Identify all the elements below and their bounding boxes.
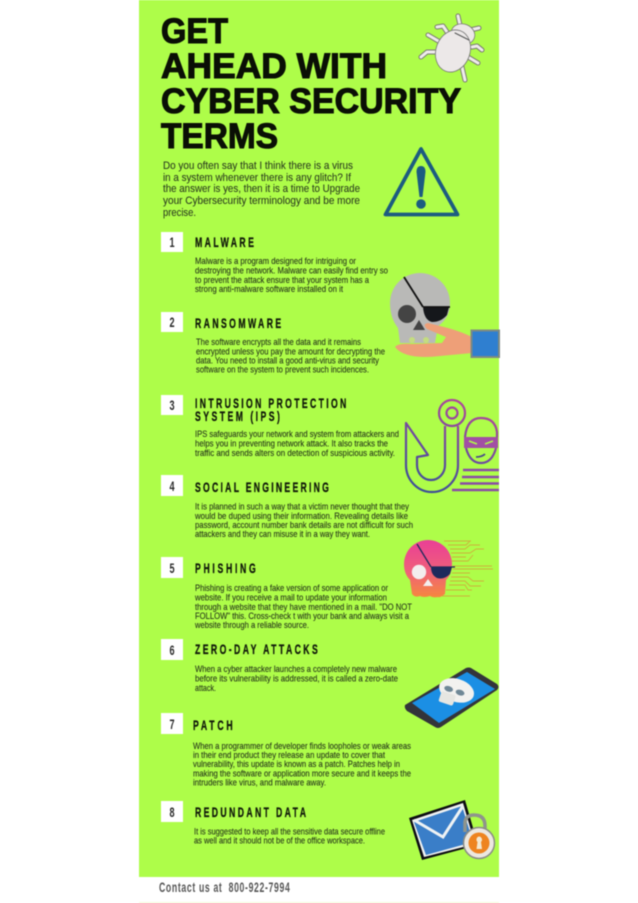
number box 3	[161, 395, 183, 415]
text: patch description: making the software or application more secure and it keeps the	[193, 768, 411, 778]
heading: intrusion protection system: INTRUSION PROTECTION	[195, 396, 346, 412]
number box 4: 4	[169, 478, 175, 495]
intro text: the answer is yes, then it is a time to Upgrade	[163, 183, 360, 195]
heading: zero-day attacks: ZERO-DAY ATTACKS	[195, 642, 318, 658]
intro text: in a system whenever there is any glitch? If	[163, 172, 352, 184]
number box 3: 3	[169, 397, 175, 414]
text: zero-day description: When a cyber attacker launches a completely new malware	[195, 664, 397, 674]
title: AHEAD WITH	[161, 47, 387, 86]
title: TERMS	[161, 117, 278, 156]
intro text	[163, 160, 360, 219]
text: patch description: in their end product they release an update to cover that	[193, 750, 385, 760]
heading: intrusion protection system	[195, 396, 346, 425]
item 8: redundant data	[161, 801, 385, 846]
number box 2	[161, 312, 183, 332]
contact line: Contact us at 800-922-7994	[159, 880, 290, 896]
intro text: Do you often say that I think there is a virus	[163, 160, 354, 172]
panel: green background	[139, 0, 499, 877]
number box 8	[161, 801, 183, 822]
text: ips description: traffic and sends alters on detection of suspicious activity.	[195, 448, 395, 458]
text: redundant data description: as well and it should not be of the office workspace.	[194, 836, 365, 846]
text: patch description: When a programmer of developer finds loopholes or weak areas	[193, 741, 411, 751]
number box 7	[161, 713, 183, 734]
text: social engineering description: password, account number bank details are not difficult for such	[195, 520, 413, 530]
icon: warning triangle	[386, 149, 458, 214]
intro text: your Cybersecurity terminology and be more	[163, 195, 360, 207]
text: redundant data description	[194, 826, 385, 846]
text: social engineering description: would be duped using their information. Revealing details like	[194, 511, 408, 521]
number box 5: 5	[169, 560, 175, 577]
text: social engineering description	[194, 502, 413, 539]
text: patch description: vulnerability, this update is known as a patch. Patches help in	[193, 759, 400, 769]
text: phishing description: FOLLOW" this. Cross-check t with your bank and always visit a	[195, 611, 409, 621]
text: zero-day description: attack.	[195, 683, 216, 693]
icon: envelope with padlock	[409, 800, 494, 860]
text: phishing description: Phishing is creating a fake version of some application or	[195, 583, 388, 593]
heading: intrusion protection system: SYSTEM (IPS)	[195, 409, 280, 425]
item 7: patch	[161, 713, 411, 788]
text: malware description: strong anti-malware software installed on it	[195, 284, 343, 294]
text: phishing description: website through a reliable source.	[194, 620, 309, 630]
icon: pink skull with circuit lines	[404, 540, 493, 597]
number box 6: 6	[169, 642, 175, 659]
heading: redundant data: REDUNDANT DATA	[195, 805, 306, 821]
text: patch description	[193, 741, 411, 788]
icon: bug	[421, 16, 482, 80]
title: CYBER SECURITY	[161, 82, 461, 121]
text: redundant data description: It is suggested to keep all the sensitive data secure offline	[194, 826, 385, 836]
heading: phishing: PHISHING	[195, 561, 256, 577]
text: ransomware description: encrypted unless you pay the amount for decrypting the	[196, 346, 385, 356]
icon: skull on hand	[390, 273, 499, 357]
number box 8: 8	[169, 804, 175, 821]
number box 1: 1	[169, 234, 175, 251]
text: malware description	[195, 256, 388, 294]
text: ransomware description	[196, 337, 385, 374]
number box 2: 2	[169, 314, 175, 331]
text: malware description: to prevent the attack ensure that your system has a	[195, 275, 369, 285]
item 1: malware	[161, 232, 388, 294]
text: phishing description: through a website that they have mentioned in a mail. "DO NOT	[195, 602, 412, 612]
heading: patch: PATCH	[193, 718, 233, 734]
text: ips description: helps you in preventing network attack. It also tracks the	[195, 438, 388, 448]
text: malware description: destroying the network. Malware can easily find entry so	[195, 266, 388, 276]
number box 1	[161, 232, 183, 252]
number box 5	[161, 557, 183, 578]
text: zero-day description: before its vulnerability is addressed, it is called a zero-date	[195, 674, 398, 684]
heading: ransomware: RANSOMWARE	[195, 316, 281, 332]
text: ransomware description: software on the system to prevent such incidences.	[196, 364, 369, 374]
text: zero-day description	[195, 664, 398, 693]
text: ips description	[195, 429, 399, 458]
text: ransomware description: The software encrypts all the data and it remains	[196, 337, 361, 347]
item 4: social engineering	[161, 475, 413, 539]
icon: phone with skull	[405, 668, 498, 728]
heading: social engineering: SOCIAL ENGINEERING	[195, 480, 329, 496]
number box 6	[161, 639, 183, 660]
number box 4	[161, 475, 183, 496]
item 3: intrusion protection system	[161, 395, 399, 458]
text: phishing description: website. If you receive a mail to update your information	[194, 592, 387, 602]
bottom edge strip	[139, 902, 499, 903]
text: patch description: intruders like virus, and malware away.	[193, 778, 326, 788]
item 2: ransomware	[161, 312, 385, 374]
text: social engineering description: It is planned in such a way that a victim never thought that they	[195, 502, 409, 512]
title	[161, 12, 461, 156]
item 5: phishing	[161, 557, 412, 630]
text: phishing description	[194, 583, 412, 630]
number box 7: 7	[169, 716, 175, 733]
title: GET	[161, 12, 228, 51]
text: social engineering description: attackers and they can misuse it in a way they want.	[195, 529, 370, 539]
heading: malware: MALWARE	[195, 235, 254, 251]
text: malware description: Malware is a program designed for intriguing or	[195, 256, 356, 266]
item 6: zero-day attacks	[161, 639, 398, 693]
icon: hook and thief	[406, 400, 499, 492]
text: ransomware description: data. You need to install a good anti-virus and security	[196, 356, 379, 366]
intro text: precise.	[163, 207, 196, 219]
text: ips description: IPS safeguards your network and system from attackers and	[195, 429, 399, 439]
